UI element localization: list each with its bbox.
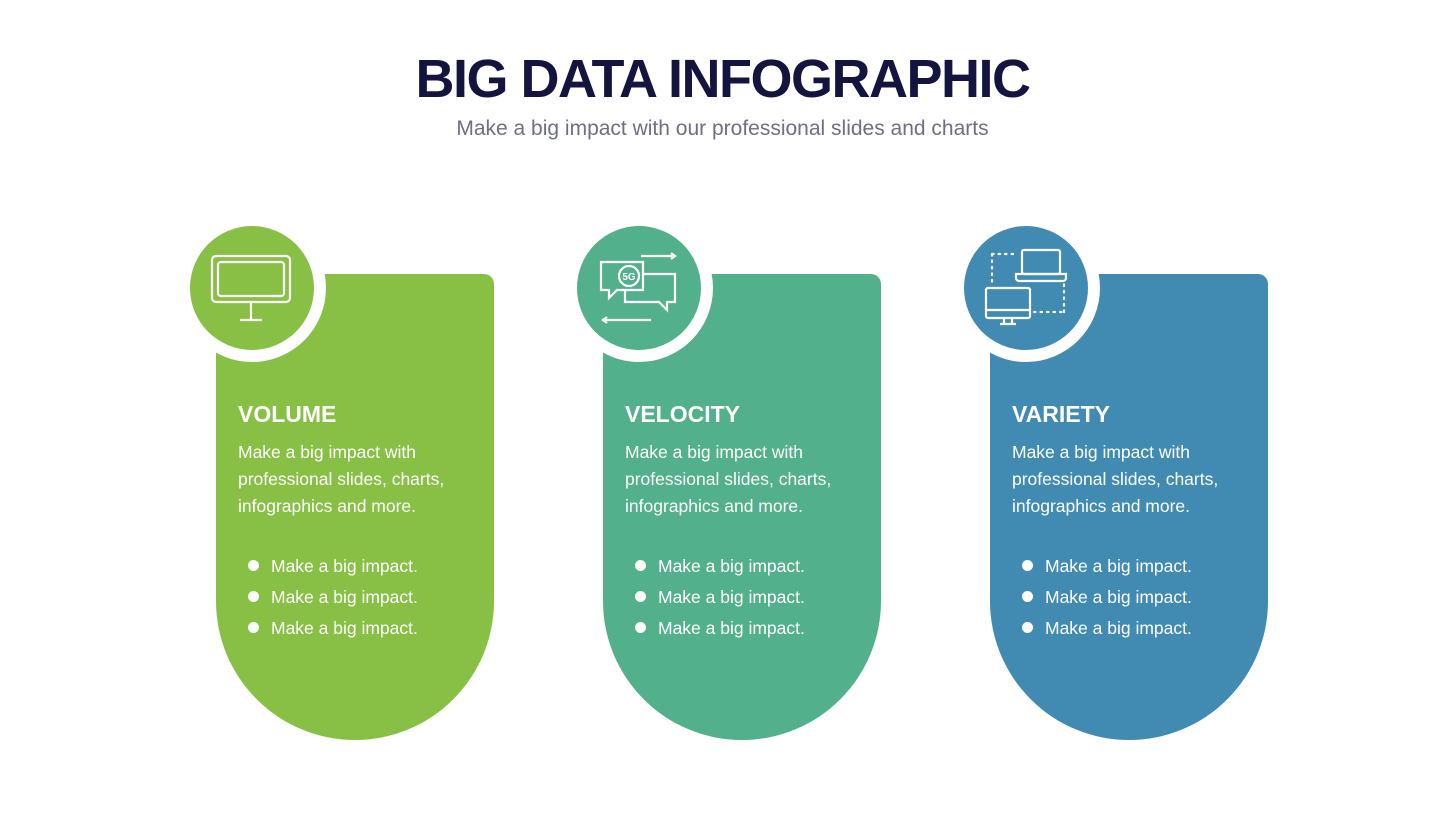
badge ring: variety — [952, 214, 1100, 362]
list: velocity bullets: Make a big impact. — [658, 587, 805, 607]
list: velocity bullets: Make a big impact. — [658, 556, 805, 576]
title: BIG DATA INFOGRAPHIC — [416, 49, 1029, 109]
list: volume bullets: Make a big impact. — [271, 618, 418, 638]
icon: 5G chat: 5G — [622, 272, 636, 283]
panel: variety — [990, 274, 1268, 740]
list: velocity bullets — [635, 556, 805, 638]
list: variety bullets: Make a big impact. — [1045, 618, 1192, 638]
icon: monitor — [190, 226, 314, 350]
panel: volume — [216, 274, 494, 740]
heading: velocity: VELOCITY — [625, 401, 740, 427]
list: variety bullets — [1022, 556, 1192, 638]
heading: volume: VOLUME — [238, 401, 336, 427]
icon: 5G chat — [577, 226, 701, 350]
list: variety bullets: Make a big impact. — [1045, 587, 1192, 607]
list: velocity bullets: Make a big impact. — [658, 618, 805, 638]
list: volume bullets: Make a big impact. — [271, 556, 418, 576]
text: velocity description: Make a big impact with professional slides, charts, infographics and more. — [625, 442, 831, 516]
list: volume bullets — [248, 556, 418, 638]
list: volume bullets: Make a big impact. — [271, 587, 418, 607]
text: variety description: Make a big impact with professional slides, charts, infographics and more. — [1012, 442, 1218, 516]
badge ring: volume — [178, 214, 326, 362]
panel: velocity — [603, 274, 881, 740]
text: volume description: Make a big impact with professional slides, charts, infographics and more. — [238, 442, 444, 516]
icon: laptop and desktop — [964, 226, 1088, 350]
badge ring: velocity — [565, 214, 713, 362]
heading: variety: VARIETY — [1012, 401, 1110, 427]
subtitle: Make a big impact with our professional slides and charts — [456, 117, 989, 140]
list: variety bullets: Make a big impact. — [1045, 556, 1192, 576]
